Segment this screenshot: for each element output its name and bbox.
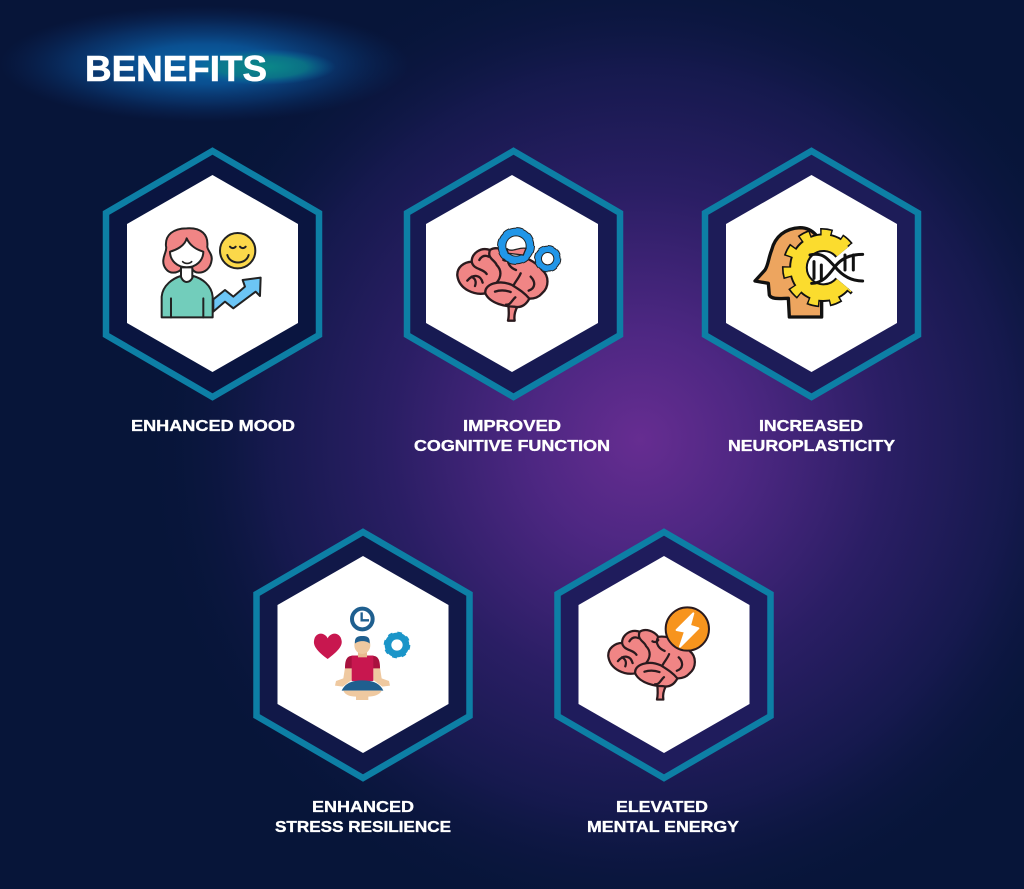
hexagon frame: [407, 151, 620, 397]
white hexagon: [426, 175, 598, 372]
panel: elevated mental energy: [558, 532, 770, 778]
white hexagon: [127, 175, 298, 372]
hexagon frame: [256, 532, 470, 778]
label: increased neuroplasticity: INCREASED: [759, 418, 863, 435]
hexagon frame: [558, 532, 770, 778]
panel: improved cognitive function: [407, 151, 620, 397]
white hexagon: [278, 556, 448, 753]
label: enhanced mood: ENHANCED MOOD: [131, 418, 295, 435]
icon: woman with smiley and rising arrow: [162, 228, 261, 317]
label: elevated mental energy: [587, 799, 740, 836]
label: elevated mental energy: MENTAL ENERGY: [587, 819, 740, 836]
label: improved cognitive function: COGNITIVE FUNCTION: [414, 438, 610, 455]
hexagon frame: [106, 151, 319, 397]
panel: increased neuroplasticity: [705, 151, 918, 397]
label: enhanced stress resilience: [275, 799, 451, 836]
icon: meditating person with heart, clock and gear: [314, 609, 408, 700]
white hexagon: [578, 556, 750, 753]
panel: enhanced stress resilience: [256, 532, 470, 778]
icon: brain with lightning bolt: [608, 607, 709, 700]
hexagon frame: [705, 151, 918, 397]
white hexagon: [726, 175, 897, 372]
label: improved cognitive function: [414, 418, 610, 455]
panel: enhanced mood: [106, 151, 319, 397]
title: BENEFITS: [85, 48, 267, 89]
label: elevated mental energy: ELEVATED: [616, 799, 708, 816]
label: improved cognitive function: IMPROVED: [463, 418, 561, 435]
label: increased neuroplasticity: [728, 418, 896, 455]
title glow: [0, 6, 410, 122]
icon: brain with gears: [457, 230, 558, 321]
label: enhanced stress resilience: STRESS RESILIENCE: [275, 819, 451, 836]
label: increased neuroplasticity: NEUROPLASTICITY: [728, 438, 896, 455]
icon: head with gear and DNA: [755, 228, 863, 317]
label: enhanced stress resilience: ENHANCED: [312, 799, 414, 816]
